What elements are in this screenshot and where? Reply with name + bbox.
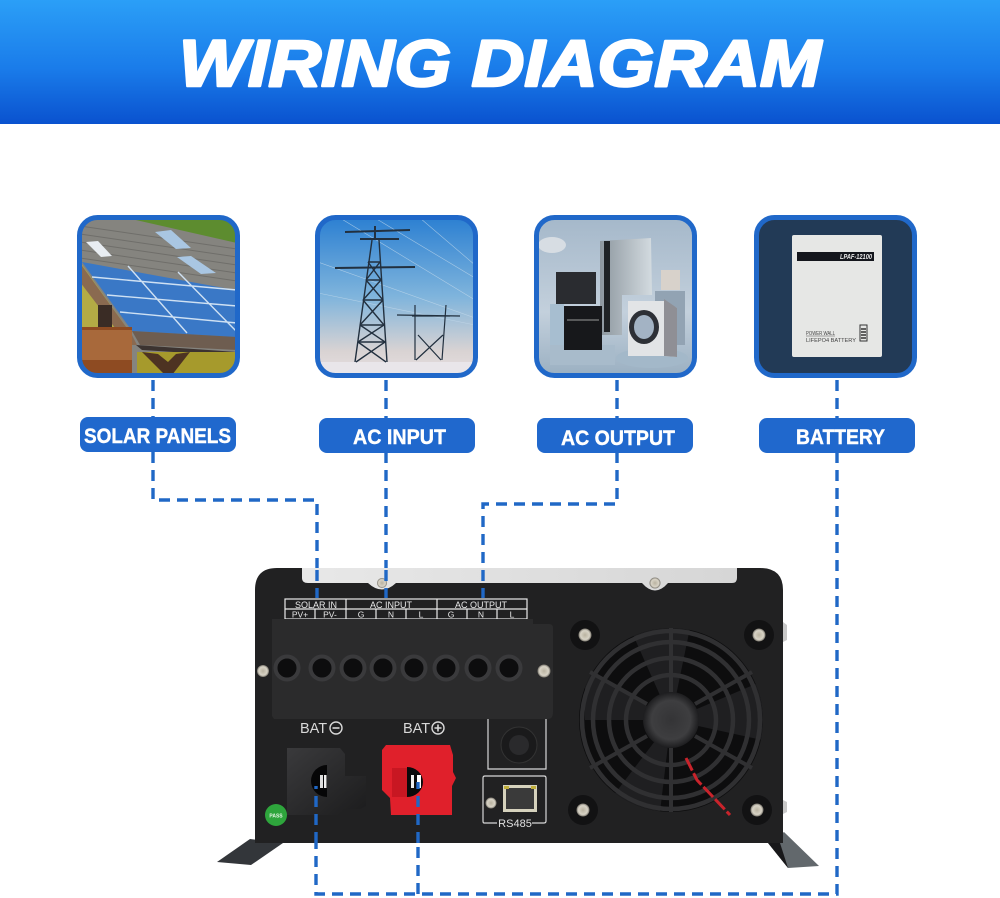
tile: solar panels frame bbox=[80, 218, 238, 376]
terminal sockets bbox=[276, 656, 520, 680]
QC pass sticker: PASS bbox=[269, 814, 283, 820]
tile: AC input photo bbox=[318, 218, 476, 376]
terminal table: PV+ bbox=[292, 610, 308, 620]
fan screw bbox=[752, 628, 766, 642]
terminal table: G bbox=[358, 610, 364, 620]
left mounting foot bbox=[217, 839, 283, 865]
terminal table: L bbox=[419, 610, 424, 620]
cooling fan bbox=[568, 620, 774, 825]
battery unit bbox=[792, 235, 882, 357]
label: AC output: AC OUTPUT bbox=[561, 427, 675, 450]
cover screw left bbox=[257, 665, 269, 677]
RS485 port: RS485 bbox=[498, 818, 532, 830]
tile: battery frame bbox=[756, 218, 914, 376]
battery unit: LIFEPO4 BATTERY bbox=[806, 338, 857, 344]
fan screw bbox=[578, 628, 592, 642]
inverter body bbox=[255, 568, 783, 843]
terminal table: G bbox=[448, 610, 454, 620]
terminal table: PV- bbox=[323, 610, 337, 620]
top cover strip bbox=[302, 568, 737, 590]
label: solar panels: SOLAR PANELS bbox=[84, 425, 231, 448]
label: battery: BATTERY bbox=[796, 426, 885, 449]
terminal table: N bbox=[388, 610, 394, 620]
tile: solar panels photo bbox=[80, 218, 238, 376]
battery unit: POWER WALL bbox=[806, 331, 835, 337]
QC pass sticker bbox=[265, 804, 287, 826]
tile: AC output frame bbox=[536, 218, 694, 376]
BAT positive label bbox=[403, 721, 444, 737]
cover screw right bbox=[650, 578, 660, 588]
label: AC input: AC INPUT bbox=[353, 426, 446, 449]
fan hub bbox=[643, 692, 699, 748]
tile: AC output photo bbox=[536, 218, 694, 376]
terminal table: SOLAR IN bbox=[295, 600, 337, 610]
terminal table bbox=[285, 599, 527, 620]
negative connector bbox=[287, 748, 366, 815]
positive connector bbox=[382, 745, 456, 815]
tile: AC input frame bbox=[318, 218, 476, 376]
inverter bbox=[217, 568, 819, 868]
terminal table: AC OUTPUT bbox=[455, 600, 507, 610]
power button box bbox=[488, 719, 546, 769]
title: WIRING DIAGRAM bbox=[179, 26, 823, 100]
BAT negative label: BAT bbox=[300, 721, 327, 737]
BAT negative label bbox=[300, 721, 342, 737]
terminal table: AC INPUT bbox=[370, 600, 412, 610]
cover screw right bbox=[538, 664, 550, 678]
terminal cover bbox=[272, 619, 553, 719]
BAT positive label: BAT bbox=[403, 721, 430, 737]
wiring connector lines bbox=[153, 380, 837, 894]
label: AC output bbox=[537, 418, 693, 453]
label: solar panels bbox=[80, 417, 236, 452]
terminal table: L bbox=[510, 610, 515, 620]
fan screw bbox=[750, 804, 764, 816]
label: AC input bbox=[319, 418, 475, 453]
battery unit: LPAF-12100 bbox=[840, 254, 872, 261]
fan screw bbox=[576, 804, 590, 816]
header banner bbox=[0, 0, 1000, 124]
RS485 port bbox=[483, 776, 546, 830]
label: battery bbox=[759, 418, 915, 453]
red fan wire bbox=[686, 758, 730, 815]
terminal table: N bbox=[478, 610, 484, 620]
cover screw left bbox=[377, 578, 387, 588]
wiring overlay on inverter bbox=[316, 570, 483, 843]
tile: battery photo bbox=[756, 218, 914, 376]
right mounting foot bbox=[768, 832, 819, 868]
